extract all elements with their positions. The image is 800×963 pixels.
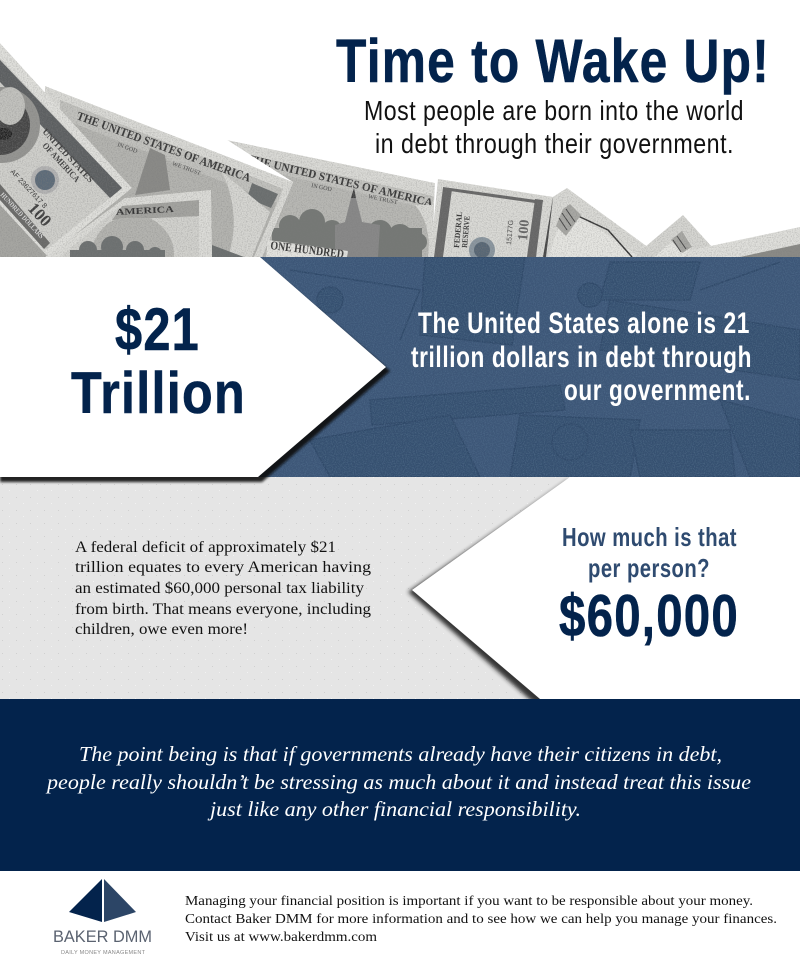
bill: centre with hall: ONE HUNDRED xyxy=(270,238,345,261)
bill: upright portrait: 15177G xyxy=(506,220,515,245)
bill: centre with hall: WE TRUST xyxy=(368,194,398,206)
bill: front left with portrait: 100 xyxy=(24,199,55,230)
photo: pile of dollar bills xyxy=(0,43,800,263)
bill: upright portrait: 100 xyxy=(516,219,533,241)
bill: centre with hall: THE UNITED STATES OF AMERICA xyxy=(246,153,434,210)
text: federal deficit paragraph: trillion equates to every American having xyxy=(75,559,371,576)
subtitle: in debt through their government. xyxy=(375,128,734,159)
text: conclusion quote xyxy=(45,742,751,821)
bill: large tilted: IN GOD xyxy=(116,142,139,155)
bill: centre with hall: IN GOD xyxy=(311,183,333,193)
big number: $60,000: $60,000 xyxy=(559,583,739,649)
bill: right corner two xyxy=(635,215,712,257)
text: footer contact xyxy=(185,894,777,945)
bill: front left with portrait xyxy=(0,43,132,257)
text: footer contact: Visit us at www.bakerdmm.com xyxy=(185,930,377,945)
bill: upright portrait xyxy=(430,179,553,263)
text: conclusion quote: just like any other financial responsibility. xyxy=(207,797,581,821)
bill: front left with portrait: OF AMERICA xyxy=(41,141,82,184)
text: federal deficit paragraph: an estimated $60,000 personal tax liability xyxy=(75,580,364,597)
big number: $21 Trillion xyxy=(71,296,246,426)
subtitle xyxy=(364,95,744,159)
text: conclusion quote: people really shouldn’t be stressing as much about it and instead treat this issue xyxy=(45,770,751,794)
big number: $21 Trillion: Trillion xyxy=(71,361,246,426)
bill: front left with portrait: HUNDRED DOLLARS xyxy=(0,191,45,240)
bill: front left with portrait: AF 23627617 8 xyxy=(9,169,48,210)
big number: $21 Trillion: $21 xyxy=(115,296,200,363)
white arrow shadow xyxy=(406,478,569,699)
text: federal deficit paragraph: A federal deficit of approximately $21 xyxy=(75,539,336,556)
text: federal deficit paragraph: children, owe even more! xyxy=(75,621,248,638)
faded bills texture xyxy=(290,257,800,477)
question: how much per person xyxy=(562,522,737,583)
bill: centre with hall xyxy=(227,140,436,261)
text: federal deficit paragraph: from birth. That means everyone, including xyxy=(75,601,371,618)
question: how much per person: per person? xyxy=(588,553,710,583)
bill: large tilted: THE UNITED STATES OF AMERICA xyxy=(75,109,253,185)
text: footer contact: Managing your financial position is important if you want to be responsible about your money. xyxy=(185,894,753,909)
question: how much per person: How much is that xyxy=(562,522,737,552)
panel: conclusion band xyxy=(0,699,800,871)
bill: large tilted xyxy=(40,86,293,257)
bill: right corner one xyxy=(543,188,646,257)
white arrow pointing right xyxy=(0,257,386,477)
white arrow pointing left xyxy=(412,477,800,699)
bill: front left with portrait: UNITED STATES xyxy=(41,127,96,185)
text: United States debt statement xyxy=(411,307,752,407)
panel: $21 trillion band xyxy=(0,257,800,482)
text: federal deficit paragraph xyxy=(75,539,371,638)
bill: right front strip xyxy=(687,227,800,257)
blue money background xyxy=(258,257,800,477)
bill: upright portrait: FEDERAL xyxy=(452,212,464,248)
panel: per person band xyxy=(0,477,570,699)
text: conclusion quote: The point being is that if governments already have their citizens in debt, xyxy=(79,742,722,766)
logo wordmark: BAKER DMM xyxy=(53,927,152,946)
bill: large tilted: WE TRUST xyxy=(171,161,202,177)
bill: lower left behind: AMERICA xyxy=(116,204,175,217)
grey background xyxy=(0,477,800,699)
logo tagline: DAILY MONEY MANAGEMENT xyxy=(61,950,146,956)
text: footer contact: Contact Baker DMM for more information and to see how we can help you manage your finances. xyxy=(185,912,777,927)
icon: pyramid xyxy=(69,879,136,922)
logo: Baker DMM xyxy=(53,879,152,956)
white arrow shadow xyxy=(0,262,390,482)
bill: lower left behind xyxy=(0,190,212,261)
bill: upright portrait: RESERVE xyxy=(460,216,472,248)
